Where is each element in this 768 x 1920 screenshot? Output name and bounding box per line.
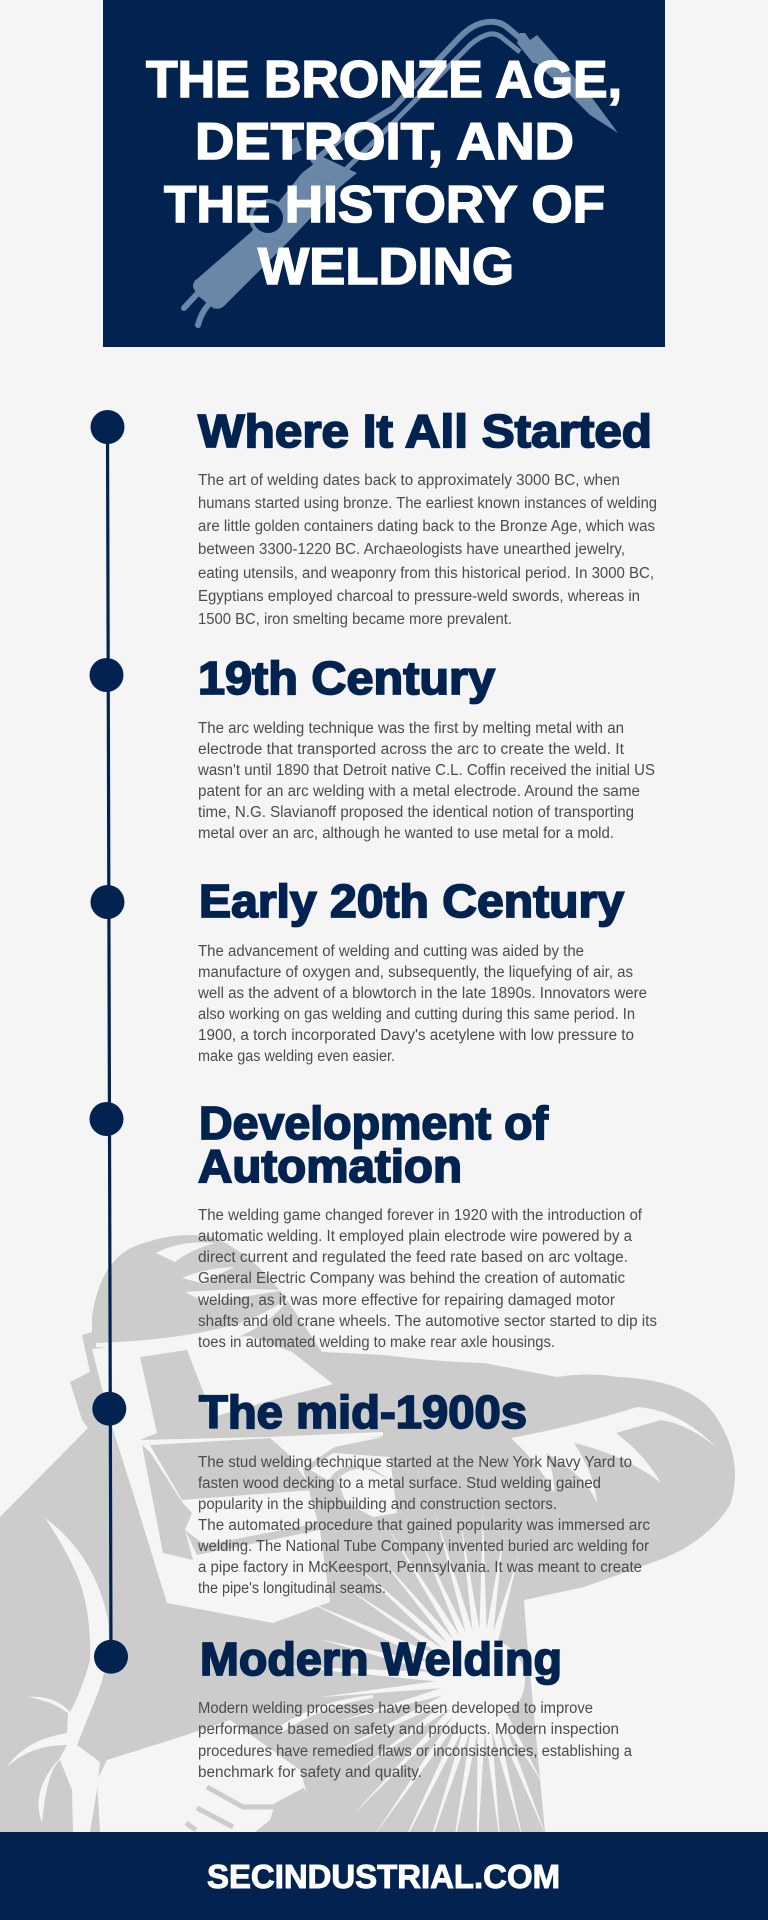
text block: direct current and regulated the feed rate based on arc voltage. <box>198 1249 628 1266</box>
text block: a pipe factory in McKeesport, Pennsylvania. It was meant to create <box>198 1559 642 1576</box>
header panel <box>103 0 665 347</box>
heading: Development of <box>199 1097 549 1149</box>
text block <box>197 1454 650 1597</box>
panel: early 20th century <box>197 875 647 1065</box>
text block: between 3300-1220 BC. Archaeologists have unearthed jewelry, <box>198 541 625 558</box>
text block: manufacture of oxygen and, subsequently, the liquefying of air, as <box>198 964 633 981</box>
heading: 19th Century <box>198 652 495 704</box>
text block: The advancement of welding and cutting was aided by the <box>198 943 584 960</box>
text block: performance based on safety and products. Modern inspection <box>198 1721 619 1738</box>
text block: electrode that transported across the arc to create the weld. It <box>198 741 625 758</box>
heading: Where It All Started <box>198 405 652 457</box>
heading <box>198 1097 549 1192</box>
text block: 1500 BC, iron smelting became more prevalent. <box>198 611 512 628</box>
panel: modern welding <box>198 1633 632 1781</box>
heading: Modern Welding <box>200 1633 562 1685</box>
text block: popularity in the shipbuilding and construction sectors. <box>198 1496 557 1513</box>
panel: 19th century <box>197 652 655 842</box>
title: THE BRONZE AGE, <box>146 51 622 109</box>
text block: make gas welding even easier. <box>198 1048 395 1065</box>
text block: the pipe's longitudinal seams. <box>198 1580 386 1597</box>
text block: procedures have remedied flaws or inconsistencies, establishing a <box>198 1743 632 1760</box>
text block <box>198 472 657 628</box>
text block: Egyptians employed charcoal to pressure-weld swords, whereas in <box>198 588 640 605</box>
text block: welding. The National Tube Company invented buried arc welding for <box>197 1538 649 1555</box>
text block: automatic welding. It employed plain electrode wire powered by a <box>198 1228 632 1245</box>
text block: toes in automated welding to make rear axle housings. <box>198 1334 555 1351</box>
text block: benchmark for safety and quality. <box>198 1764 422 1781</box>
text block: are little golden containers dating back to the Bronze Age, which was <box>198 518 655 535</box>
panel: the mid-1900s <box>197 1386 650 1597</box>
text block: time, N.G. Slavianoff proposed the identical notion of transporting <box>198 804 634 821</box>
text block: Modern welding processes have been developed to improve <box>198 1700 593 1717</box>
title: WELDING <box>258 238 514 296</box>
background illustration: welder silhouette <box>0 1235 735 1865</box>
text block: The welding game changed forever in 1920 with the introduction of <box>198 1207 643 1224</box>
icon: welding sparks <box>278 1510 550 1865</box>
text block: The art of welding dates back to approximately 3000 BC, when <box>198 472 620 489</box>
text block: fasten wood decking to a metal surface. Stud welding gained <box>198 1475 601 1492</box>
text block: eating utensils, and weaponry from this historical period. In 3000 BC, <box>198 565 654 582</box>
panel: where it all started <box>198 405 657 628</box>
timeline <box>90 410 128 1674</box>
website url: SECINDUSTRIAL.COM <box>207 1858 560 1895</box>
text block: General Electric Company was behind the creation of automatic <box>198 1270 625 1287</box>
text block: well as the advent of a blowtorch in the late 1890s. Innovators were <box>197 985 647 1002</box>
text block: welding, as it was more effective for repairing damaged motor <box>197 1292 615 1309</box>
text block: 1900, a torch incorporated Davy's acetylene with low pressure to <box>198 1027 634 1044</box>
text block <box>198 1700 632 1781</box>
heading: Automation <box>198 1140 462 1192</box>
title <box>146 51 622 296</box>
text block: The arc welding technique was the first by melting metal with an <box>198 720 624 737</box>
text block: shafts and old crane wheels. The automotive sector started to dip its <box>198 1313 657 1330</box>
title: THE HISTORY OF <box>164 176 605 234</box>
text block: patent for an arc welding with a metal electrode. Around the same <box>198 783 640 800</box>
title: DETROIT, AND <box>195 113 574 171</box>
text block <box>197 943 647 1065</box>
text block: The stud welding technique started at the New York Navy Yard to <box>198 1454 632 1471</box>
text block <box>197 1207 657 1351</box>
text block <box>197 720 655 842</box>
text block: humans started using bronze. The earliest known instances of welding <box>198 495 657 512</box>
text block: metal over an arc, although he wanted to use metal for a mold. <box>198 825 614 842</box>
heading: Early 20th Century <box>199 875 624 927</box>
text block: also working on gas welding and cutting during this same period. In <box>198 1006 635 1023</box>
text block: wasn't until 1890 that Detroit native C.L. Coffin received the initial US <box>197 762 655 779</box>
footer band <box>0 1832 768 1920</box>
icon: welding torch <box>184 22 618 325</box>
heading: The mid-1900s <box>199 1386 527 1438</box>
text block: The automated procedure that gained popularity was immersed arc <box>198 1517 650 1534</box>
panel: development of automation <box>197 1097 657 1351</box>
